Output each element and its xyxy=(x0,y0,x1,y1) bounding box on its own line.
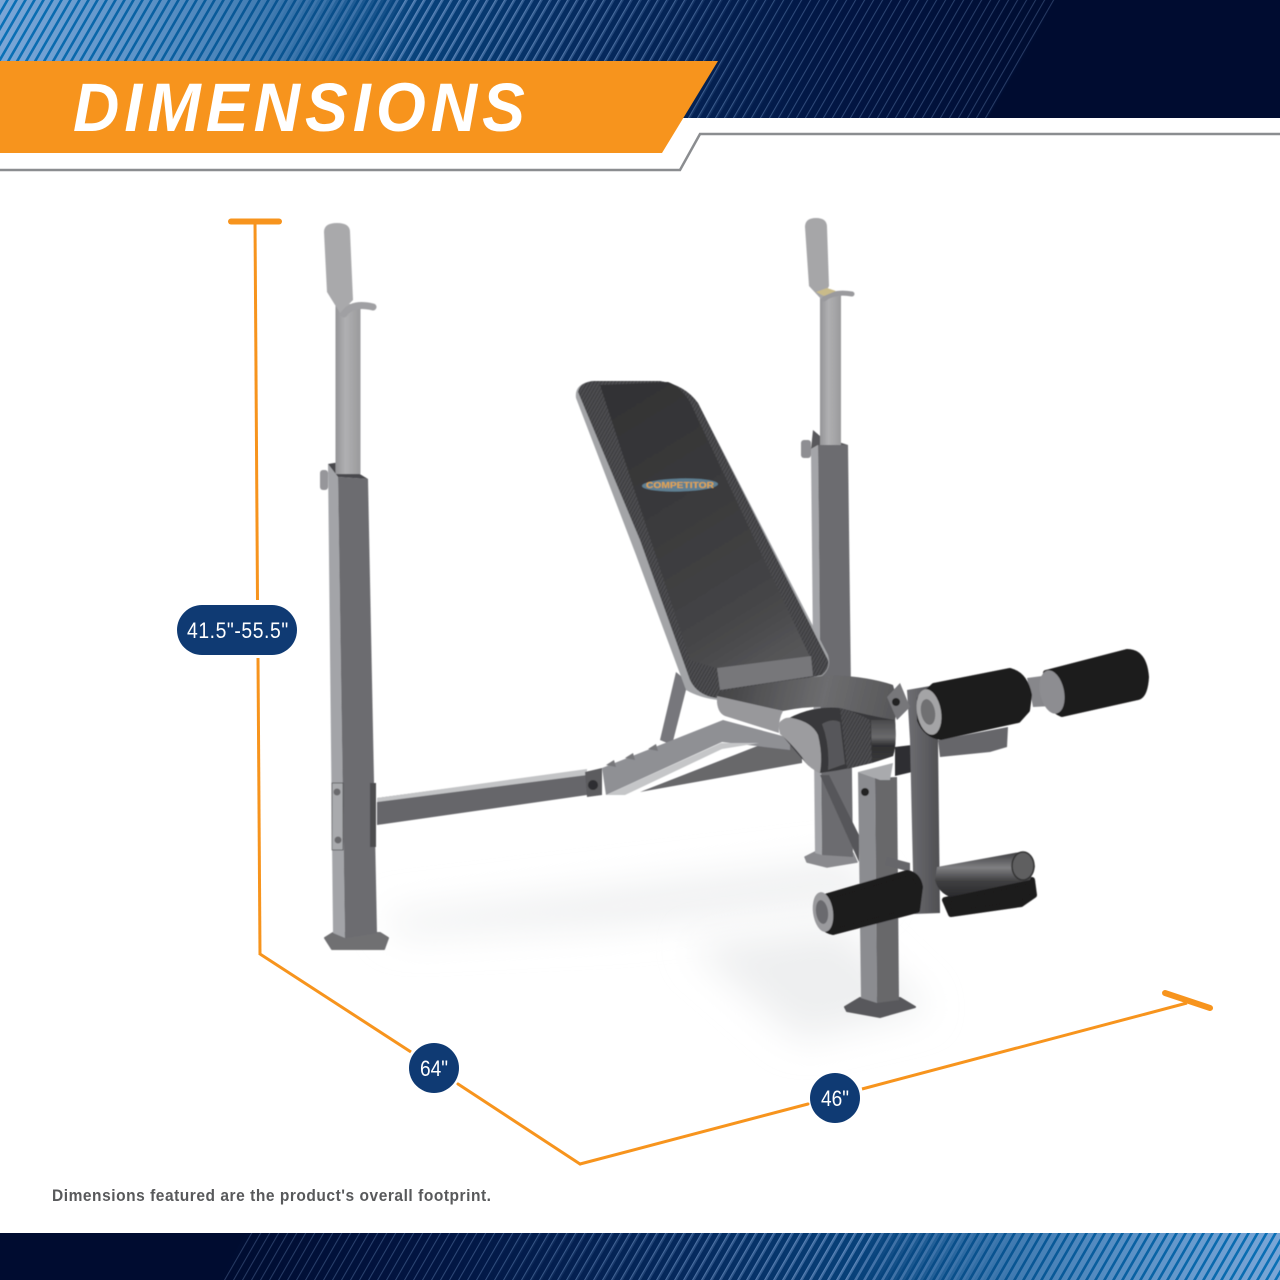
lower front foam roller xyxy=(810,873,920,933)
front post xyxy=(845,763,915,1017)
brand badge xyxy=(642,478,718,492)
left upright post xyxy=(320,223,388,949)
height dimension line xyxy=(231,221,279,955)
width label xyxy=(810,1073,860,1123)
brand badge: COMPETITOR xyxy=(646,481,714,490)
cross bar xyxy=(377,768,602,825)
height label xyxy=(177,605,297,655)
grey header rule xyxy=(0,134,1280,170)
diagonal brace xyxy=(820,775,859,862)
length label xyxy=(409,1043,459,1093)
leg extension arm xyxy=(887,683,940,914)
title: DIMENSIONS xyxy=(73,70,525,147)
lower chrome sleeve xyxy=(935,852,1035,897)
incline frame xyxy=(602,720,802,795)
lower rear foam roller xyxy=(945,880,1034,914)
right upright post xyxy=(801,218,857,867)
back pad strut xyxy=(660,672,688,745)
width dimension line xyxy=(580,993,1210,1164)
upper front foam roller xyxy=(913,671,1029,737)
weight bench xyxy=(320,218,1146,1017)
length label: 64" xyxy=(420,1056,448,1081)
footnote: Dimensions featured are the product's overall footprint. xyxy=(52,1188,491,1205)
upper rear foam roller xyxy=(1027,652,1146,716)
title ribbon xyxy=(0,61,718,153)
bottom banner: blue striped gradient footer xyxy=(0,1233,1280,1280)
lower rod xyxy=(885,857,910,872)
length dimension line xyxy=(260,954,580,1164)
width label: 46" xyxy=(821,1086,849,1111)
floor shadow xyxy=(385,860,930,1040)
pivot dark cross piece xyxy=(895,745,912,776)
back pad xyxy=(576,381,829,700)
rear lower pad xyxy=(938,727,1008,757)
height label: 41.5"-55.5" xyxy=(187,619,288,643)
seat pad xyxy=(717,675,896,773)
top banner: blue striped gradient header xyxy=(0,0,1280,118)
